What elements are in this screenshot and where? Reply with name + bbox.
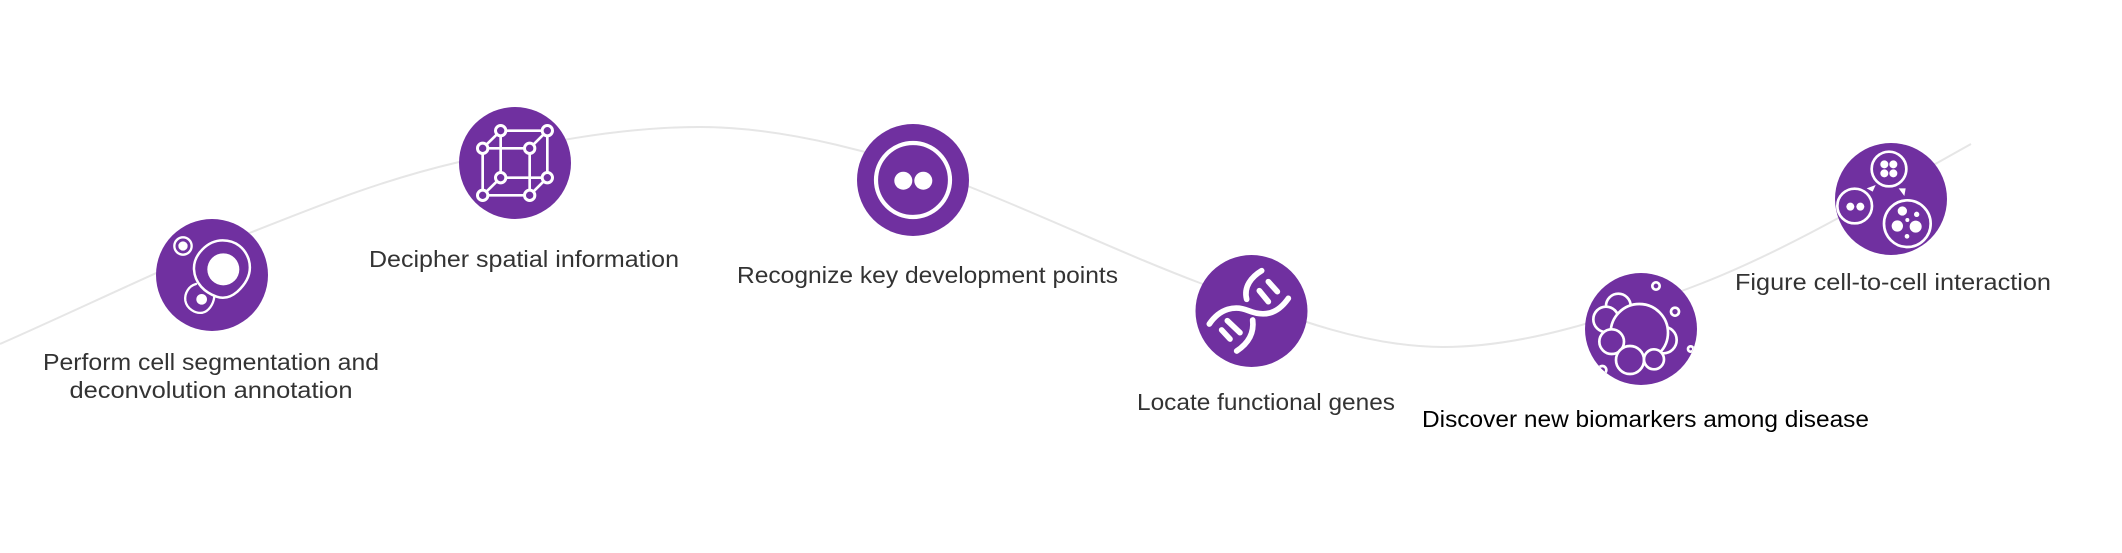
- step 1: cell segmentation: [43, 219, 379, 403]
- connecting curve: [0, 127, 1971, 347]
- icon: cube lattice: [459, 107, 571, 219]
- label: locate functional genes: Locate functional genes: [1137, 389, 1395, 415]
- label: figure cell-to-cell interaction: Figure cell-to-cell interaction: [1735, 269, 2051, 295]
- label: decipher spatial information: Decipher spatial information: [369, 246, 679, 272]
- step 5: biomarkers: [1422, 273, 1869, 432]
- icon: cell cluster: [1585, 273, 1697, 385]
- step 6: cell interaction: [1735, 143, 2051, 295]
- label: perform cell segmentation: Perform cell segmentation and: [43, 349, 379, 375]
- icon: interacting cells: [1835, 143, 1947, 255]
- label: deconvolution annotation: deconvolution annotation: [70, 377, 352, 403]
- label: discover new biomarkers: Discover new biomarkers among disease: [1422, 406, 1869, 432]
- label: recognize key development points: Recognize key development points: [737, 262, 1118, 288]
- icon: ring with two dots: [857, 124, 969, 236]
- step 3: development points: [737, 124, 1118, 288]
- icon: cells: [156, 219, 268, 331]
- icon: DNA helix: [1196, 255, 1308, 367]
- step 2: spatial information: [369, 107, 679, 272]
- step 4: functional genes: [1137, 255, 1395, 415]
